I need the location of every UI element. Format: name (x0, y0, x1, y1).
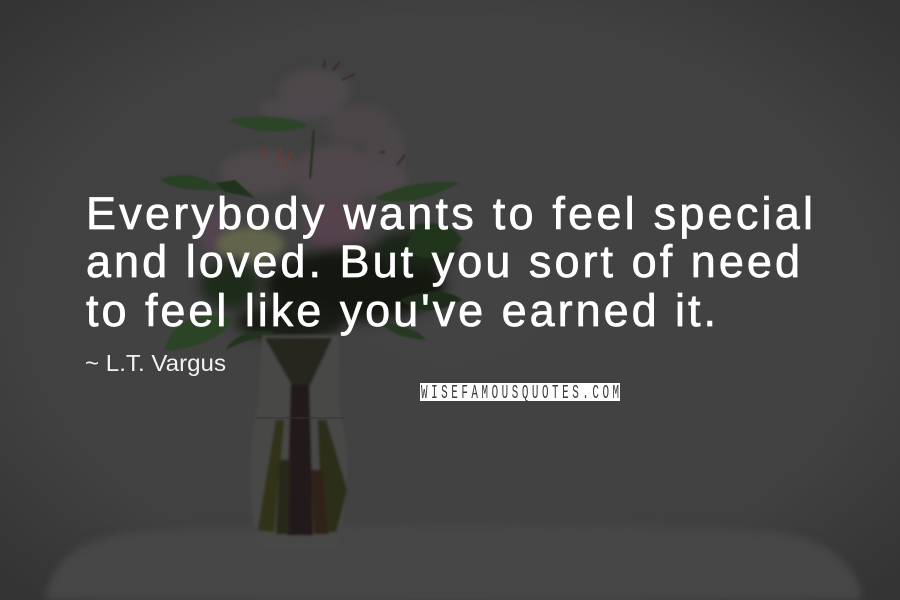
cream flower (216, 227, 284, 263)
quote text: Everybody wants to feel special (86, 188, 813, 239)
quote text: and loved. But you sort of need (86, 236, 800, 287)
stamens (262, 60, 405, 166)
stem (310, 130, 314, 178)
flower bouquet (160, 60, 462, 350)
watermark: WISEFAMOUSQUOTES.COM (421, 382, 619, 404)
author: ~ L.T. Vargus (85, 350, 226, 376)
table cloth (45, 524, 862, 600)
stems in vase (258, 338, 347, 535)
glass vase (249, 335, 347, 548)
quote text: to feel like you've earned it. (86, 285, 716, 336)
lily petals (199, 70, 408, 254)
dark foliage (200, 230, 457, 340)
vase body (249, 335, 347, 548)
water line (256, 417, 344, 419)
leaves (160, 117, 462, 350)
quote text (86, 188, 813, 336)
